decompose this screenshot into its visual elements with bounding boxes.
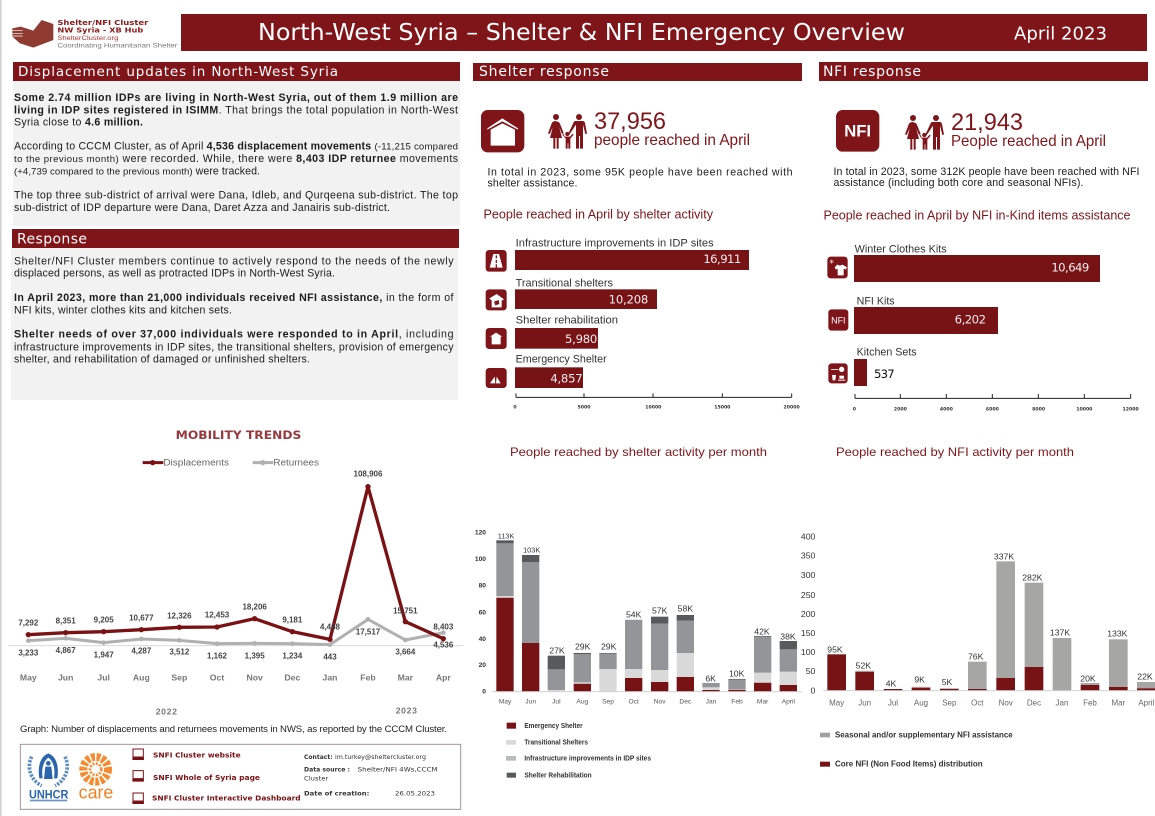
- totals: 29K: [601, 641, 617, 651]
- y axis labels: 350: [801, 551, 816, 561]
- totals: 20K: [1080, 674, 1096, 684]
- month labels: Jul: [888, 699, 898, 708]
- legend: Returnees: [273, 458, 320, 468]
- bar chart: people reached by shelter activity: [486, 238, 801, 411]
- text block: shelter total: shelter assistance.: [488, 178, 578, 190]
- y axis labels: 250: [801, 590, 816, 600]
- link: SNFI Whole of Syria page: SNFI Whole of Syria page: [153, 773, 260, 782]
- contact details: Contact:: [304, 754, 333, 761]
- totals: 4K: [886, 679, 897, 689]
- logo: Shelter/NFI Cluster: Shelter/NFI Cluster: [57, 19, 149, 27]
- y axis labels: 60: [479, 609, 486, 616]
- data labels: displacements: 7,292: [18, 619, 39, 628]
- month axis labels: Feb: [360, 673, 376, 683]
- data labels: displacements: 9,181: [282, 616, 303, 625]
- month labels: Feb: [1083, 699, 1097, 708]
- caption: graph note: Graph: Number of displacements and returnees movements in NWS, as reported by the CCCM Cluster.: [20, 724, 447, 735]
- stacked bar chart: NFI activity per month: [801, 532, 1155, 769]
- axis: [513, 393, 801, 411]
- month labels: Jun: [525, 699, 536, 706]
- contact details: Cluster: [304, 776, 329, 783]
- y axis labels: 40: [479, 636, 486, 643]
- month labels: [829, 699, 1155, 708]
- y axis labels: 80: [479, 583, 486, 590]
- month labels: May: [829, 699, 844, 708]
- legend: [506, 723, 651, 779]
- footer box: [20, 744, 461, 809]
- data labels: displacements: 4,468: [320, 623, 341, 632]
- month axis labels: Jun: [58, 673, 73, 683]
- data labels: returnees: 3,664: [395, 648, 416, 657]
- data labels: displacements: 108,906: [354, 470, 383, 479]
- text block: displacement figures: to the previous month) were recorded. While, there were 8,403 IDP returnee movements: [14, 153, 458, 165]
- bar chart: people reached by NFI items: 10,649: [1051, 261, 1089, 275]
- month labels: Nov: [654, 699, 666, 706]
- icon: transitional shelter: [486, 289, 507, 310]
- y axis labels: 400: [801, 532, 816, 542]
- month axis labels: [20, 673, 451, 683]
- axis: 0: [513, 405, 517, 411]
- data labels: displacements: 8,351: [56, 617, 76, 626]
- heading: displacement updates: Displacement updates in North-West Syria: [18, 64, 338, 80]
- data labels: displacements: 15,751: [393, 607, 418, 616]
- month labels: Dec: [679, 699, 692, 706]
- legend: Displacements: [163, 458, 230, 468]
- text block: displacement figures: living in IDP sites registered in ISIMM. That brings the total population in North-West: [14, 104, 458, 116]
- stat: 21,943 people reached: People reached in April: [951, 133, 1106, 150]
- data labels: returnees: 1,234: [282, 652, 303, 661]
- month axis labels: Jul: [97, 673, 110, 683]
- heading: NFI monthly chart: People reached by NFI activity per month: [836, 445, 1074, 459]
- totals: 76K: [968, 651, 984, 661]
- month axis labels: Apr: [436, 673, 451, 683]
- legend: Shelter Rehabilitation: [524, 772, 592, 779]
- text block: response details: Shelter needs of over 37,000 individuals were responded to in April, including: [14, 328, 454, 340]
- data labels: returnees: 1,162: [207, 652, 228, 661]
- axis: 5000: [578, 405, 591, 411]
- link: SNFI Cluster Interactive Dashboard: SNFI Cluster Interactive Dashboard: [152, 794, 301, 803]
- heading: NFI items chart: People reached in April by NFI in-Kind items assistance: [824, 208, 1131, 222]
- axis: [853, 394, 1140, 413]
- icon: winter clothes: *: [830, 259, 835, 269]
- icon: kitchen set: [828, 363, 848, 383]
- axis: 6000: [986, 407, 1000, 413]
- text block: shelter total: [488, 166, 793, 190]
- data labels: returnees: [18, 623, 454, 662]
- legend: Emergency Shelter: [524, 723, 583, 730]
- text block: displacement figures: [14, 92, 458, 214]
- totals: 103K: [523, 546, 540, 555]
- totals: 57K: [652, 605, 668, 615]
- logo: UNHCR: UNHCR: [29, 788, 69, 801]
- data labels: returnees: 3,233: [18, 649, 39, 658]
- month labels: Jan: [706, 699, 717, 706]
- text block: response details: infrastructure improvements in IDP sites, the transitional shelters, provision of emergency: [14, 342, 454, 354]
- totals: 6K: [705, 673, 716, 683]
- month labels: Jun: [858, 699, 871, 708]
- bar chart: people reached by shelter activity: 16,911: [703, 252, 741, 266]
- data labels: returnees: 4,287: [131, 647, 152, 656]
- month labels: Nov: [999, 699, 1013, 708]
- icon: family: [548, 114, 587, 149]
- bar chart: people reached by NFI items: 6,202: [955, 313, 986, 327]
- year labels: 2022: [156, 707, 178, 717]
- y axis labels: 200: [801, 609, 816, 619]
- month axis labels: Oct: [210, 673, 224, 683]
- logo: CARE: care: [79, 781, 113, 802]
- bar chart: people reached by shelter activity: Emergency Shelter: [516, 354, 607, 366]
- y axis labels: 0: [811, 685, 816, 695]
- data labels: displacements: 18,206: [242, 603, 267, 612]
- bars: [496, 540, 797, 691]
- month labels: April: [1138, 699, 1155, 708]
- icon: shelter house: [481, 110, 524, 152]
- data labels: returnees: 1,947: [94, 651, 114, 660]
- text block: response details: displaced persons, as well as protracted IDPs in North-West Syria.: [14, 268, 335, 280]
- month axis labels: Sep: [171, 673, 187, 683]
- month labels: Feb: [731, 699, 743, 706]
- icon: winter clothes: [827, 257, 848, 278]
- y axis labels: 120: [475, 529, 486, 536]
- totals: [498, 532, 796, 683]
- data labels: returnees: 17,517: [356, 628, 381, 637]
- legend: Infrastructure improvements in IDP sites: [524, 756, 651, 763]
- axis: 0: [853, 407, 857, 413]
- heading: mobility trends: MOBILITY TRENDS: [176, 428, 301, 442]
- contact details: im.turkey@sheltercluster.org: [335, 753, 426, 761]
- text block: displacement figures: The top three sub-district of arrival were Dana, Idleb, and Qurqeena sub-district. The top: [14, 190, 458, 202]
- logo: Shelter/NFI Cluster: Coordinating Humanitarian Shelter: [57, 43, 178, 50]
- totals: [827, 552, 1153, 689]
- legend: Seasonal and/or supplementary NFI assistance: [835, 731, 1013, 740]
- text block: NFI total: In total in 2023, some 312K people have been reached with NFI: [834, 166, 1140, 178]
- text block: displacement figures: Syria close to 4.6 million.: [14, 116, 143, 128]
- text block: displacement figures: According to CCCM Cluster, as of April 4,536 displacement movements (-11,215 compared: [14, 140, 458, 152]
- totals: 282K: [1022, 572, 1043, 582]
- y axis labels: 300: [801, 570, 816, 580]
- totals: 38K: [780, 631, 796, 641]
- month axis labels: Mar: [398, 673, 414, 683]
- bar chart: people reached by NFI items: NFI Kits: [857, 296, 895, 308]
- month labels: Sep: [942, 699, 957, 708]
- month axis labels: Nov: [246, 673, 263, 683]
- icon: NFI kit: [828, 309, 848, 331]
- axis: 8000: [1032, 407, 1046, 413]
- y axis labels: 0: [482, 689, 486, 696]
- totals: 137K: [1050, 628, 1070, 638]
- month labels: Aug: [576, 699, 589, 706]
- text block: response details: [14, 256, 454, 366]
- month labels: Mar: [1111, 699, 1126, 708]
- legend: Core NFI (Non Food Items) distribution: [835, 760, 983, 769]
- totals: 22K: [1137, 672, 1153, 682]
- title banner: North-West Syria – Shelter & NFI Emergency Overview: [258, 20, 905, 46]
- data labels: returnees: 443: [323, 653, 337, 662]
- y axis labels: 150: [801, 628, 816, 638]
- data labels: displacements: 9,205: [94, 616, 114, 625]
- data labels: displacements: [18, 470, 454, 650]
- heading: shelter activity chart: People reached in April by shelter activity: [484, 208, 714, 222]
- month axis labels: Jan: [323, 673, 337, 683]
- stacked bar chart: shelter activity per month: [475, 529, 802, 779]
- icon: family: [905, 115, 944, 150]
- contact details: 26.05.2023: [395, 791, 435, 798]
- y axis labels: 20: [479, 662, 486, 669]
- year labels: 2023: [396, 706, 418, 716]
- bar chart: people reached by shelter activity: Transitional shelters: [516, 278, 613, 290]
- title banner: April 2023: [1014, 24, 1107, 44]
- text block: displacement figures: Some 2.74 million IDPs are living in North-West Syria, out of them 1.9 million are: [14, 92, 458, 104]
- bar chart: people reached by shelter activity: 4,857: [550, 372, 583, 386]
- icon: NFI: [836, 110, 879, 152]
- icon: shelter rehabilitation: [486, 328, 507, 349]
- totals: 133K: [1107, 629, 1128, 639]
- totals: 54K: [626, 610, 642, 620]
- text block: response details: In April 2023, more than 21,000 individuals received NFI assistance, in the form of: [14, 292, 454, 304]
- month labels: Jan: [1056, 699, 1068, 708]
- totals: 9K: [914, 675, 925, 685]
- data labels: displacements: 12,453: [205, 611, 230, 620]
- bar chart: people reached by NFI items: Kitchen Sets: [857, 347, 917, 359]
- text block: NFI total: [834, 166, 1140, 189]
- logo: Shelter/NFI Cluster: ShelterCluster.org: [57, 35, 119, 42]
- data labels: displacements: 10,677: [129, 614, 154, 623]
- link: SNFI Whole of Syria page: [132, 771, 260, 782]
- heading: shelter response: Shelter response: [479, 64, 609, 80]
- icon: NFI: NFI: [844, 122, 871, 141]
- totals: 10K: [729, 669, 745, 679]
- totals: 29K: [575, 641, 591, 651]
- data labels: returnees: 1,395: [245, 652, 265, 661]
- text block: NFI total: assistance (including both core and seasonal NFIs).: [834, 177, 1084, 189]
- link: SNFI Cluster website: [132, 749, 241, 760]
- icon: road: [486, 250, 507, 272]
- line: returnees: [26, 617, 446, 647]
- axis: 4000: [940, 407, 954, 413]
- y axis labels: 50: [806, 666, 816, 676]
- totals: 58K: [678, 604, 693, 614]
- legend: [143, 458, 320, 468]
- month labels: Jul: [552, 699, 561, 706]
- month axis labels: May: [20, 673, 37, 683]
- y axis labels: [475, 529, 486, 696]
- totals: 5K: [942, 677, 953, 687]
- month labels: Mar: [757, 699, 769, 706]
- totals: 27K: [549, 645, 565, 655]
- link: SNFI Cluster website: SNFI Cluster website: [153, 751, 241, 760]
- totals: 42K: [754, 627, 770, 637]
- contact details: Shelter/NFI 4Ws,CCCM: [358, 767, 438, 774]
- heading: shelter monthly chart: People reached by shelter activity per month: [510, 445, 767, 459]
- bar chart: people reached by shelter activity: Infrastructure improvements in IDP sites: [516, 238, 714, 250]
- bars: [827, 561, 1155, 690]
- axis: 15000: [714, 405, 731, 411]
- month labels: Dec: [1027, 699, 1041, 708]
- text block: response details: Shelter/NFI Cluster members continue to actively respond to the needs of the newly: [14, 256, 454, 268]
- stat: 37,956 people reached: 37,956: [594, 108, 666, 135]
- month labels: Oct: [971, 699, 984, 708]
- text block: displacement figures: (+4,739 compared to the previous month) were tracked.: [14, 166, 260, 178]
- icon: emergency tent: [486, 368, 507, 388]
- bar chart: people reached by shelter activity: Shelter rehabilitation: [516, 315, 618, 327]
- contact details: Date of creation:: [304, 791, 369, 798]
- icon: NFI kit: NFI: [831, 315, 846, 325]
- stat: 37,956 people reached: people reached in April: [594, 132, 750, 149]
- totals: 113K: [498, 532, 514, 541]
- stat: 37,956 people reached: [594, 108, 750, 149]
- month labels: April: [782, 699, 796, 706]
- month labels: May: [499, 699, 512, 706]
- stat: 21,943 people reached: 21,943: [951, 109, 1023, 136]
- y axis labels: 100: [475, 556, 486, 563]
- month labels: Aug: [914, 699, 928, 708]
- logo: UNHCR: [29, 753, 69, 801]
- bar chart: people reached by shelter activity: 5,980: [565, 332, 597, 346]
- heading: response: Response: [17, 232, 87, 248]
- axis: 20000: [784, 405, 801, 411]
- title banner: [181, 14, 1147, 51]
- axis: 10000: [1076, 407, 1093, 413]
- axis: 2000: [894, 407, 908, 413]
- line: displacements: [26, 484, 446, 642]
- bar chart: people reached by NFI items: Winter Clothes Kits: [855, 244, 947, 256]
- y axis labels: 100: [801, 647, 816, 657]
- month axis labels: Dec: [284, 673, 300, 683]
- panel: displacement updates: [13, 62, 460, 226]
- logo: CARE: [79, 757, 113, 802]
- y axis labels: [801, 532, 816, 695]
- text block: displacement figures: sub-district of IDP departure were Dana, Daret Azza and Janairis sub-district.: [14, 202, 390, 214]
- legend: Transitional Shelters: [524, 739, 588, 746]
- data labels: returnees: 4,867: [56, 646, 76, 655]
- heading: NFI response: NFI response: [823, 64, 921, 80]
- bar chart: people reached by NFI items: [827, 244, 1140, 413]
- text block: response details: NFI kits, winter clothes kits and kitchen sets.: [14, 304, 232, 316]
- panel: response: [11, 229, 459, 400]
- year labels: [156, 706, 418, 717]
- data labels: returnees: 8,403: [433, 623, 454, 632]
- panel: shelter response: [473, 63, 802, 411]
- axis: 10000: [645, 405, 662, 411]
- data labels: returnees: 3,512: [169, 648, 190, 657]
- month axis labels: Aug: [133, 673, 150, 683]
- legend: [820, 731, 1013, 769]
- text block: response details: shelter, and rehabilitation of damaged or unfinished shelters.: [14, 354, 310, 366]
- data labels: displacements: 4,536: [433, 641, 454, 650]
- bar chart: people reached by NFI items: 537: [874, 367, 895, 381]
- axis: 12000: [1123, 407, 1140, 413]
- logo: Shelter/NFI Cluster: [12, 19, 178, 50]
- stat: 21,943 people reached: [951, 109, 1106, 150]
- line chart: mobility trends: [8, 428, 463, 717]
- month labels: Oct: [628, 699, 639, 706]
- totals: 337K: [994, 552, 1014, 562]
- logo: Shelter/NFI Cluster: NW Syria - XB Hub: [57, 27, 144, 35]
- bar chart: people reached by shelter activity: 10,208: [609, 293, 648, 307]
- month labels: Sep: [602, 699, 614, 706]
- contact details: [304, 753, 438, 798]
- totals: 52K: [856, 661, 871, 671]
- data labels: displacements: 12,326: [167, 612, 192, 621]
- text block: shelter total: In total in 2023, some 95K people have been reached with: [488, 166, 793, 178]
- totals: 95K: [827, 645, 843, 655]
- contact details: Data source :: [304, 767, 350, 774]
- month labels: [499, 699, 796, 706]
- panel: NFI response: [819, 62, 1148, 413]
